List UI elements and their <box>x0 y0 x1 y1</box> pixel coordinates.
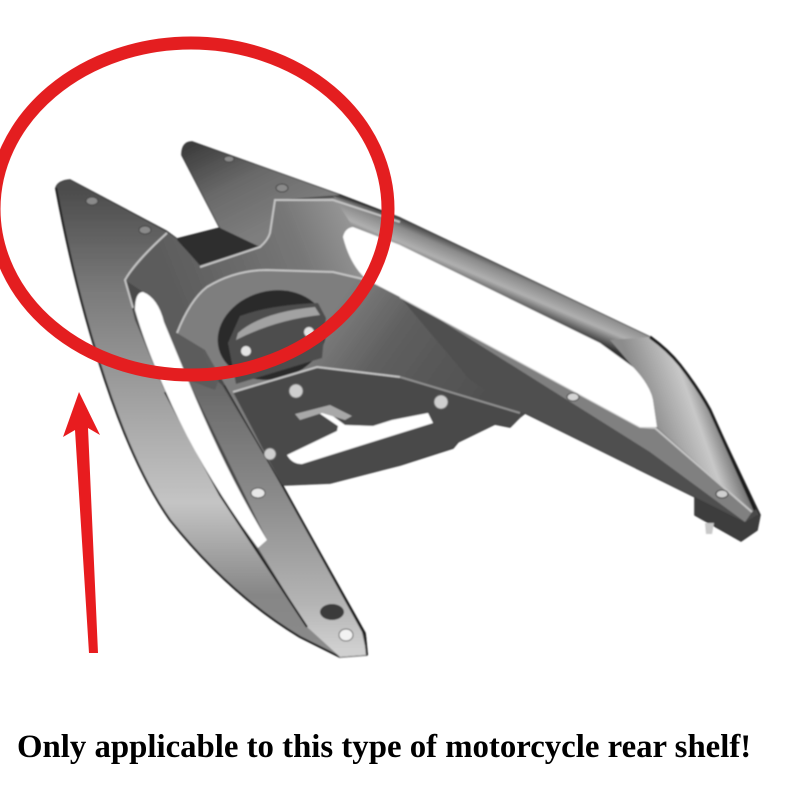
right arm opening <box>343 227 657 427</box>
bracket bolts <box>241 327 314 356</box>
bracket highlight <box>236 307 320 340</box>
shelf silhouette <box>56 142 760 657</box>
dark edge lines of left arm <box>165 385 367 655</box>
left arm inner strip <box>178 345 367 657</box>
red highlight circle <box>0 43 388 375</box>
lower bar light top face <box>440 320 752 522</box>
dark notch block <box>177 228 260 265</box>
red arrow <box>63 392 100 653</box>
caption: Only applicable to this type of motorcycle rear shelf! <box>17 729 751 765</box>
plate <box>233 367 525 485</box>
left arm outer edge line <box>56 188 340 657</box>
web panel under arc <box>177 270 695 497</box>
lower right bar <box>400 297 750 530</box>
upper arm tip <box>182 142 340 247</box>
left arm blade <box>56 180 340 657</box>
bracket <box>228 303 326 384</box>
right arm tube <box>333 196 680 372</box>
plate opening <box>287 408 433 464</box>
plate bolts <box>264 384 448 460</box>
rear end block <box>695 497 760 541</box>
plate notch detail <box>295 405 352 420</box>
strip bolts and holes <box>251 393 728 641</box>
left arm slot <box>135 292 267 548</box>
bracket recess <box>207 278 337 392</box>
central body <box>125 198 400 390</box>
mounting holes on tips <box>86 156 288 234</box>
tip dark outer edge <box>650 337 755 510</box>
right arm rear tip <box>610 337 755 515</box>
motorcycle rear shelf illustration <box>56 142 760 657</box>
ridge lines <box>125 200 752 512</box>
rear bolt stub <box>705 523 714 534</box>
